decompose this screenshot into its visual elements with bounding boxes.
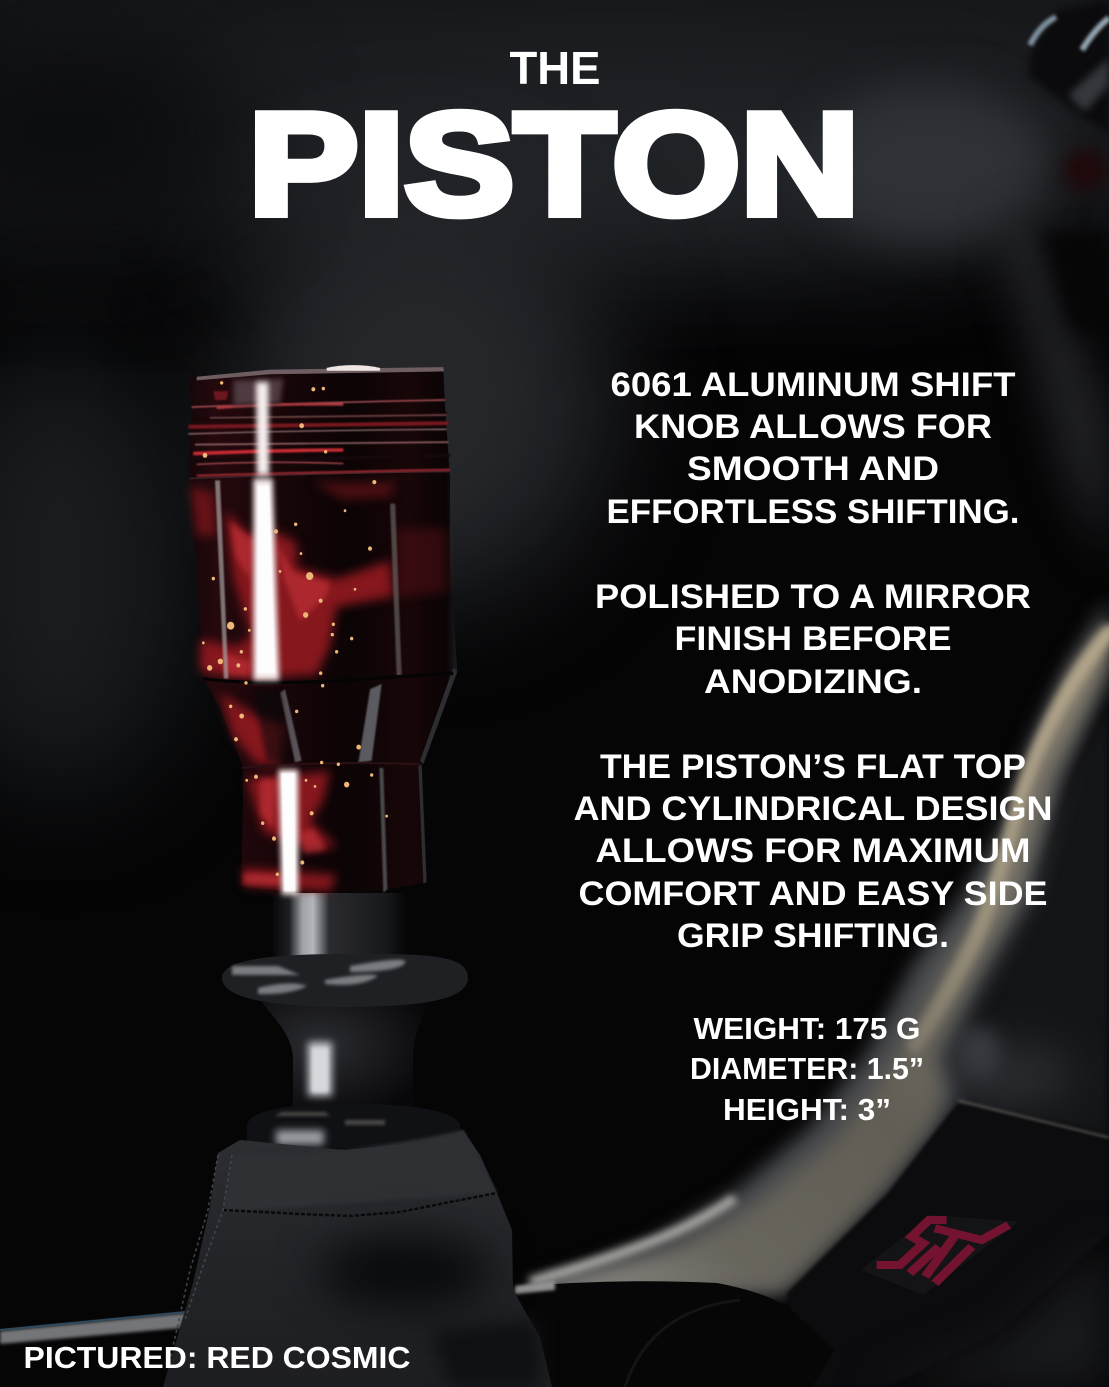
caption: PICTURED: RED COSMIC: [24, 1340, 410, 1375]
facet highlights: [215, 480, 228, 679]
description: material: KNOB ALLOWS FOR: [634, 408, 992, 446]
description: material: [606, 366, 1020, 531]
specifications: WEIGHT: 175 G: [694, 1011, 920, 1046]
description: design: THE PISTON’S FLAT TOP: [600, 748, 1026, 786]
gold speckles: [202, 381, 388, 876]
red swirls: [190, 482, 447, 891]
description: design: ALLOWS FOR MAXIMUM: [596, 832, 1030, 870]
upper right control: [1028, 0, 1109, 135]
leather shift boot: [163, 1130, 552, 1387]
panel right of rim: [945, 710, 1109, 1137]
STI badge: [861, 1215, 1018, 1295]
specifications: [690, 1011, 924, 1127]
description: design: [574, 748, 1052, 955]
knob silhouette: [188, 368, 457, 893]
description: material: 6061 ALUMINUM SHIFT: [610, 366, 1016, 404]
description: finish: FINISH BEFORE: [674, 620, 952, 658]
title: PISTON: PISTON: [248, 83, 860, 245]
specifications: DIAMETER: 1.5”: [690, 1051, 924, 1086]
description: design: COMFORT AND EASY SIDE: [578, 875, 1048, 913]
section edges: [190, 471, 450, 479]
description: finish: POLISHED TO A MIRROR: [595, 578, 1031, 616]
lower right housing: [870, 1240, 1109, 1387]
description: design: GRIP SHIFTING.: [677, 917, 949, 955]
carbon spoke panel: [787, 1103, 1109, 1387]
red knob body (coordinates in crop space): [188, 365, 457, 895]
steering wheel rim glow: [525, 600, 1109, 1300]
description: material: EFFORTLESS SHIFTING.: [606, 493, 1020, 531]
title: THE: THE: [510, 42, 600, 94]
description: finish: [595, 578, 1031, 701]
mirror highlights: [253, 382, 298, 895]
description: material: SMOOTH AND: [687, 450, 939, 488]
steering wheel rim: [545, 625, 1109, 1296]
specifications: HEIGHT: 3”: [723, 1092, 891, 1127]
description: design: AND CYLINDRICAL DESIGN: [574, 790, 1052, 828]
dash diagonal band: [1000, 215, 1109, 560]
top lip and threads: [188, 400, 450, 476]
shifter shaft and collar: [222, 893, 468, 1148]
lower left trim: [0, 1313, 186, 1344]
shifter surround ring: [500, 1281, 835, 1387]
rim highlight streak: [915, 632, 1109, 1045]
description: finish: ANODIZING.: [704, 663, 922, 701]
